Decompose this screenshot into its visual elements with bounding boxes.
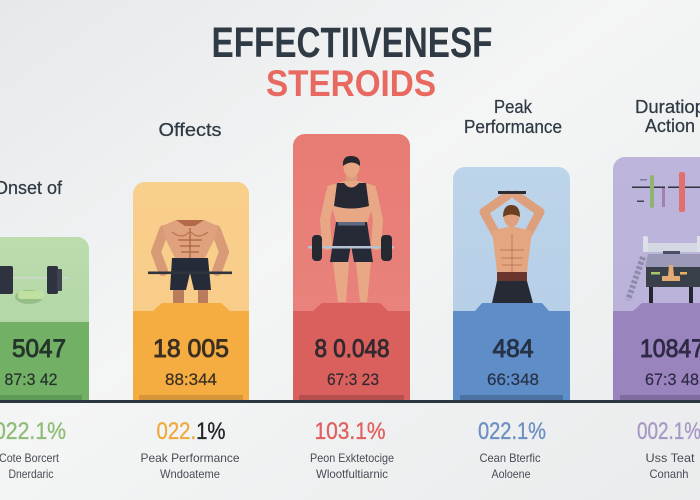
stat: peak: Wlootfultiarnic xyxy=(316,467,388,481)
sub value: 66:348 xyxy=(487,371,539,389)
heading: peak performance: Peak xyxy=(494,96,533,117)
stat: peak xyxy=(310,418,394,481)
icon: athlete lifting bar overhead xyxy=(484,191,540,303)
panel: effects card xyxy=(133,182,249,400)
baseline xyxy=(0,400,700,403)
sub value: 87:3 42 xyxy=(4,371,58,389)
panel: performance card xyxy=(453,167,570,400)
heading: offects: Offects xyxy=(158,119,222,140)
panel: onset card xyxy=(0,237,89,400)
icon: standing athlete with barbell xyxy=(308,156,394,302)
stat: duration: Conanh xyxy=(650,467,688,481)
stat: performance: Aoloene xyxy=(492,467,531,481)
heading: duration of action: Action xyxy=(645,115,695,136)
sub value: 67:3 48 xyxy=(645,371,699,389)
icon: gym bench machine xyxy=(628,236,700,303)
stat: onset: Dnerdaric xyxy=(8,467,54,481)
stat: duration xyxy=(637,418,700,481)
icon: chart marks xyxy=(632,172,700,212)
sub value: 67:3 23 xyxy=(327,371,379,389)
stat: peak: Peon Exktetocige xyxy=(310,451,394,465)
panel: peak card xyxy=(293,134,410,400)
sub value: 88:344 xyxy=(165,371,217,389)
stat: onset: Cote Borcert xyxy=(0,451,60,465)
stat: performance: 022.1% xyxy=(478,418,546,445)
title xyxy=(212,19,492,104)
stat: effects: Wndoateme xyxy=(160,467,220,481)
panel: duration card xyxy=(613,157,700,400)
stat: effects: Peak Performance xyxy=(140,451,240,465)
title: STEROIDS xyxy=(266,63,436,104)
heading: peak performance: Performance xyxy=(464,116,562,137)
icon: barbell xyxy=(0,266,68,304)
value: 484 xyxy=(492,335,534,363)
icon: muscular torso with barbell xyxy=(148,220,232,303)
heading: peak performance xyxy=(464,96,562,137)
stat: duration: Uss Teat xyxy=(646,451,695,465)
stat: effects: 022.1% xyxy=(156,418,226,445)
stat: onset xyxy=(0,418,66,481)
title: EFFECTIIVENESF xyxy=(212,19,492,67)
heading: duration of action xyxy=(635,96,700,136)
stat: performance: Cean Bterfic xyxy=(480,451,540,465)
value: 18 005 xyxy=(153,335,229,363)
stat: performance xyxy=(478,418,546,481)
stat: effects xyxy=(140,418,240,481)
value: 5047 xyxy=(12,335,66,363)
value: 8 0.048 xyxy=(314,335,390,363)
stat: peak: 103.1% xyxy=(314,418,386,445)
